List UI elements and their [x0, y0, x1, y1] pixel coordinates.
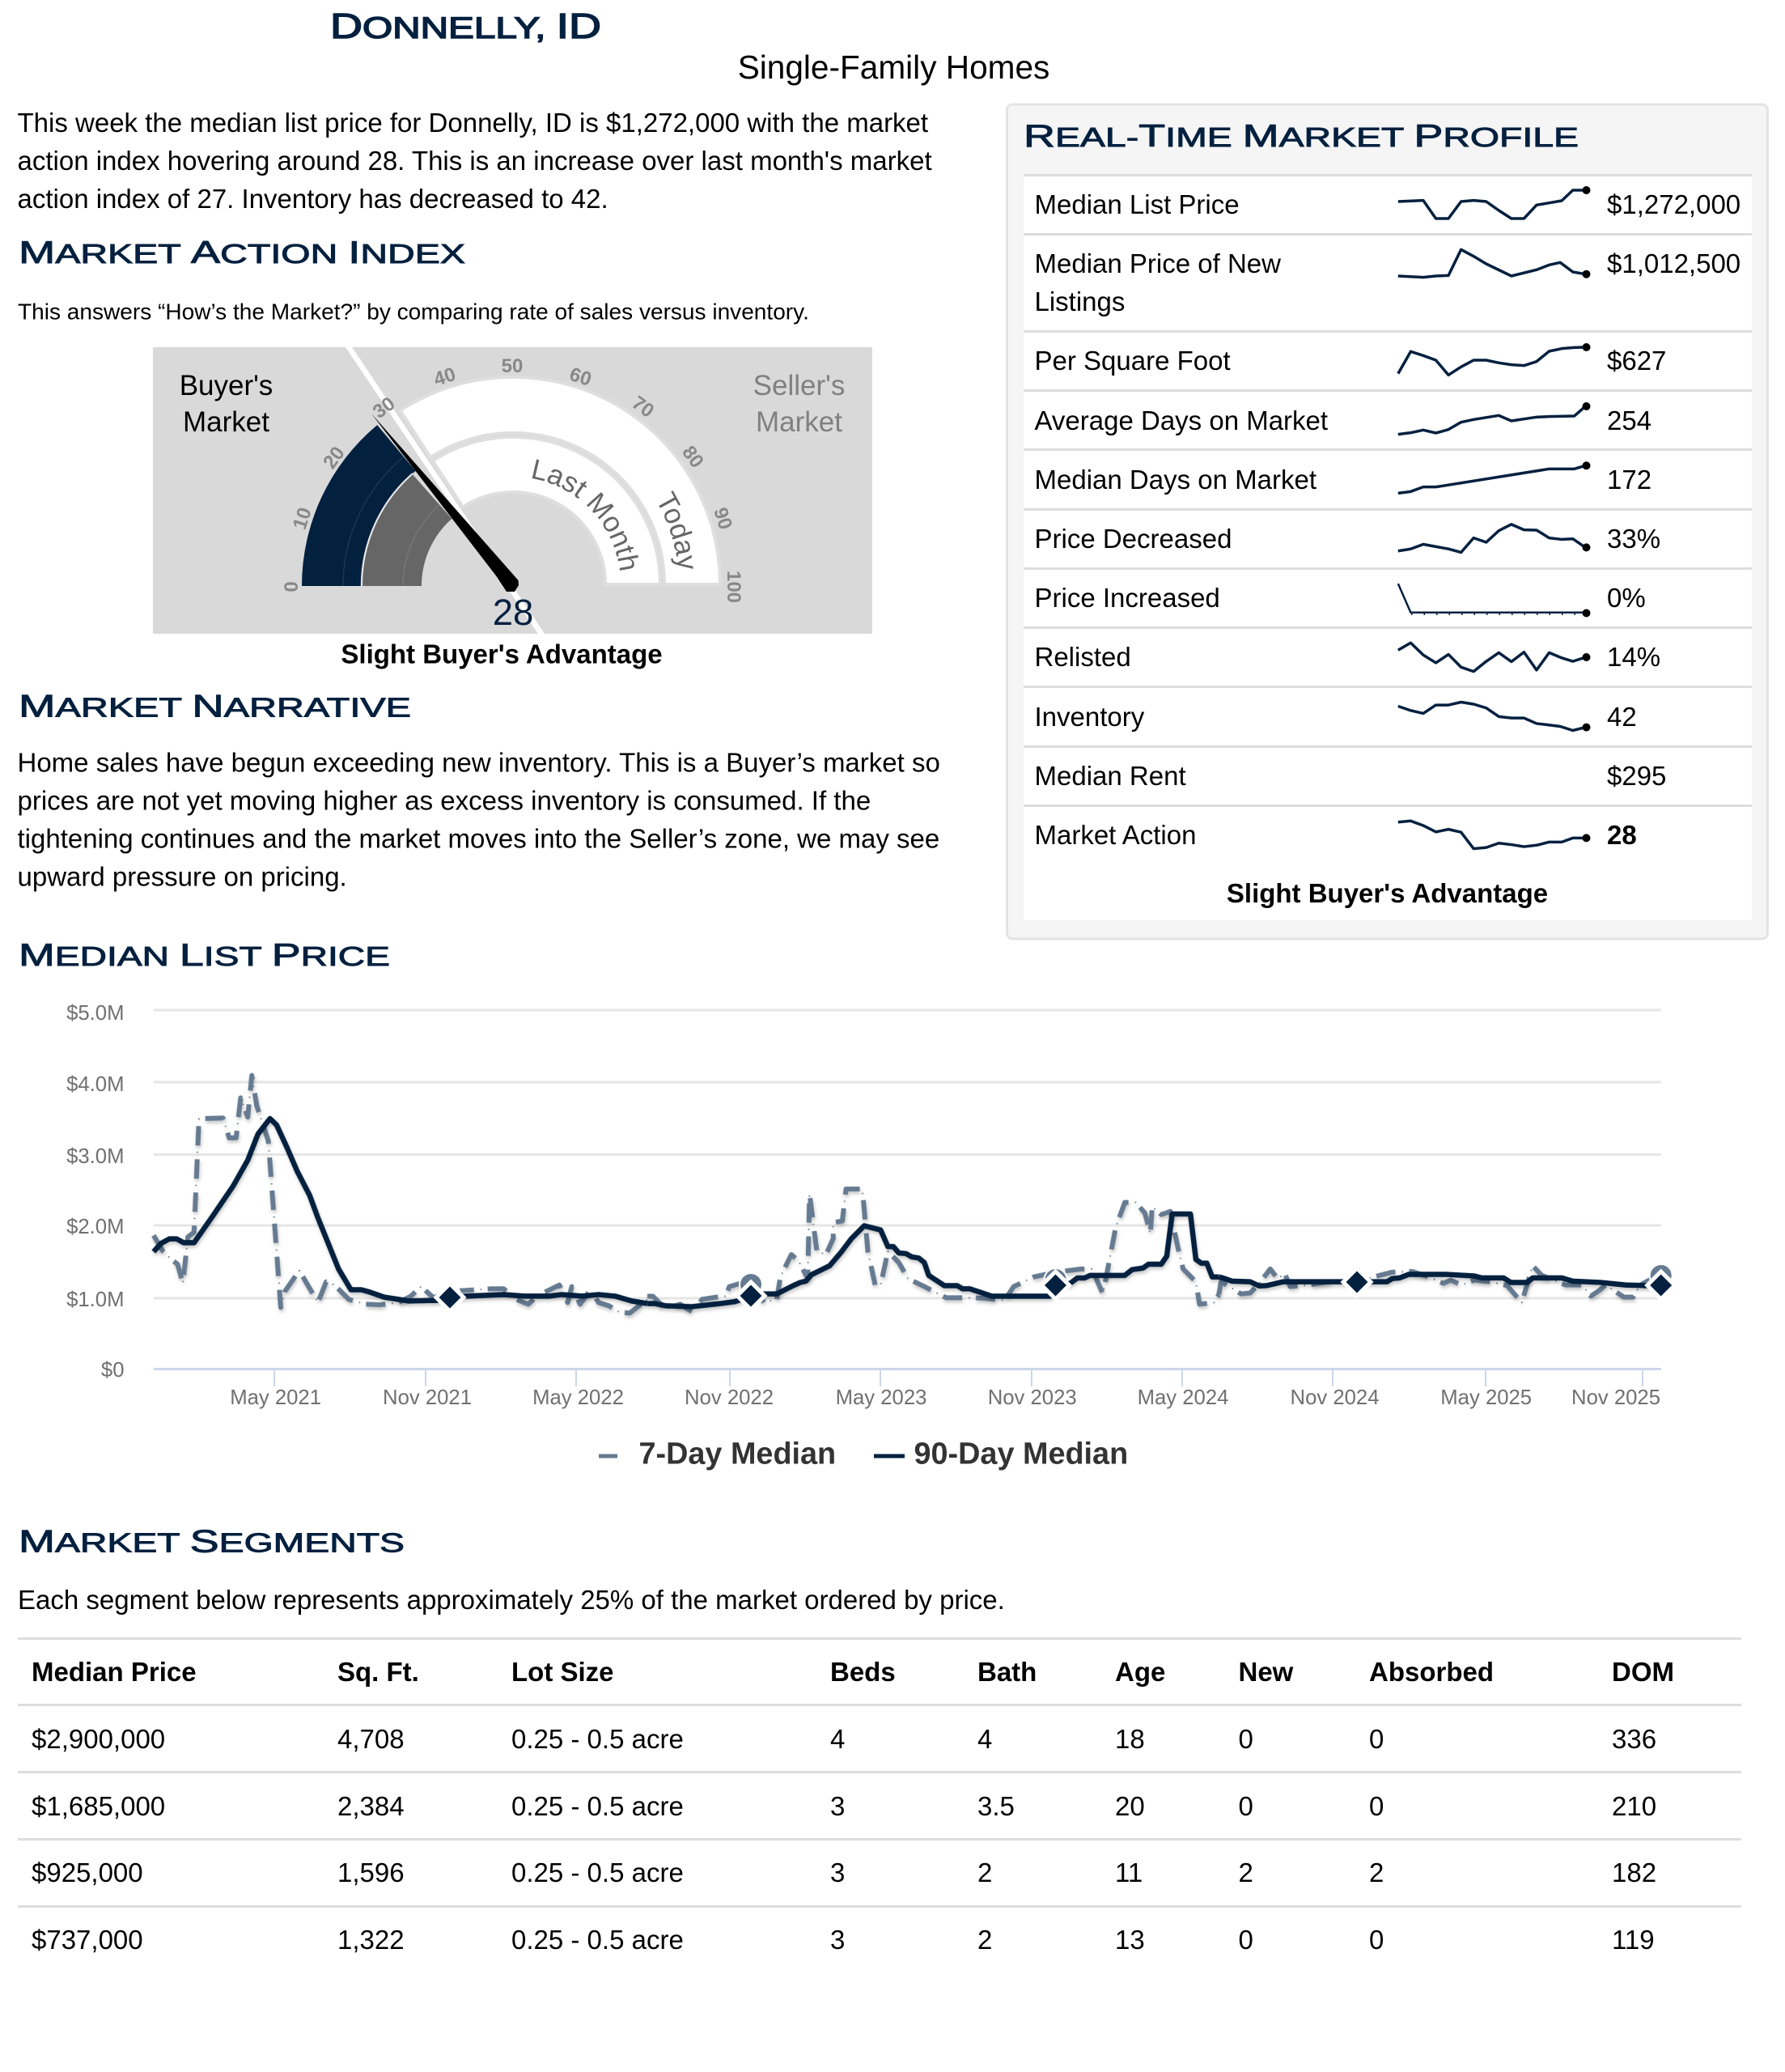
- table header: Median Price: [32, 1657, 197, 1687]
- table row 2: 0.25 - 0.5 acre: [511, 1791, 684, 1821]
- table row 1: 4: [830, 1724, 845, 1754]
- gauge: seller's market label: [753, 370, 845, 438]
- table row 4: [32, 1925, 1655, 1955]
- heading: market action index: M ARKET A CTION INDEX: [19, 236, 465, 270]
- y axis labels: $2.0M: [66, 1216, 125, 1238]
- y axis labels: [66, 1002, 125, 1382]
- x axis labels: May 2022: [532, 1386, 624, 1409]
- table row 3: 0.25 - 0.5 acre: [511, 1858, 684, 1887]
- legend: 7-day median: 7-Day Median: [639, 1437, 836, 1471]
- narrative paragraph: prices are not yet moving higher as excess inventory is consumed. If the: [18, 785, 871, 816]
- table row 3: 1,596: [337, 1858, 405, 1887]
- row: median rent: [1034, 761, 1666, 791]
- row: price increased: 0%: [1607, 583, 1646, 613]
- gauge: today label: Today: [659, 490, 693, 569]
- x axis labels: Nov 2025: [1571, 1386, 1660, 1409]
- gauge: scale ticks: 100: [723, 571, 744, 603]
- gauge: needle: [371, 414, 519, 592]
- y axis labels: $1.0M: [66, 1289, 125, 1311]
- gauge: scale ticks: 90: [709, 505, 736, 533]
- row: average days on market: 254: [1607, 405, 1651, 435]
- intro paragraph: action index of 27. Inventory has decreased to 42.: [18, 184, 608, 214]
- gauge: market action index: [153, 347, 872, 634]
- table header: Sq. Ft.: [337, 1657, 419, 1687]
- table row 3: $925,000: [32, 1858, 143, 1887]
- table row 4: 0: [1238, 1925, 1253, 1955]
- row: relisted: 14%: [1607, 642, 1660, 672]
- table row 3: 2: [1369, 1858, 1384, 1887]
- table row 3: [32, 1858, 1656, 1887]
- intro paragraph: This week the median list price for Donnelly, ID is $1,272,000 with the market: [18, 108, 928, 138]
- table header: Bath: [977, 1657, 1037, 1687]
- row: relisted: [1034, 642, 1660, 672]
- table header: Beds: [830, 1657, 896, 1687]
- table row 3: 2: [977, 1858, 992, 1887]
- y axis labels: $0: [101, 1359, 125, 1382]
- table row 1: $2,900,000: [32, 1724, 165, 1754]
- table row 2: 0: [1238, 1791, 1253, 1821]
- table row 1: 0: [1238, 1724, 1253, 1754]
- gauge: buyer's market label: Market: [183, 406, 269, 438]
- subtitle: Single-Family Homes: [738, 49, 1049, 86]
- gauge: seller's market label: Market: [756, 406, 842, 438]
- table row 2: 3.5: [977, 1791, 1015, 1821]
- x axis labels: May 2024: [1138, 1386, 1228, 1409]
- line chart: median list price: [66, 1002, 1675, 1471]
- gauge: scale ticks: 80: [677, 442, 708, 472]
- y axis labels: $4.0M: [66, 1073, 125, 1096]
- row: market action: [1034, 820, 1637, 850]
- x axis labels: Nov 2023: [988, 1386, 1077, 1409]
- gauge: white band last month: [433, 437, 660, 584]
- table row 2: 2,384: [337, 1791, 405, 1821]
- row: market action: Market Action: [1034, 820, 1196, 850]
- narrative paragraph: Home sales have begun exceeding new inventory. This is a Buyer’s market so: [18, 748, 940, 777]
- table header: Lot Size: [511, 1657, 614, 1687]
- x axis labels: Nov 2021: [383, 1386, 472, 1409]
- gauge: scale ticks: 10: [289, 505, 316, 533]
- table row 4: 2: [977, 1925, 992, 1955]
- title: DONNELLY, ID: [330, 7, 601, 46]
- heading: median list price: M EDIAN LIST P RICE: [19, 938, 390, 973]
- table row 4: $737,000: [32, 1925, 143, 1955]
- x axis labels: Nov 2022: [685, 1386, 774, 1409]
- gauge: scale ticks: 30: [369, 393, 399, 423]
- gauge: buyer's market label: Buyer's: [180, 370, 273, 401]
- table row 1: 18: [1115, 1724, 1145, 1754]
- narrative paragraph: upward pressure on pricing.: [18, 861, 347, 892]
- market action description: This answers “How’s the Market?” by comparing rate of sales versus inventory.: [18, 299, 809, 324]
- table row 3: 11: [1115, 1858, 1143, 1887]
- x axis labels: May 2025: [1440, 1386, 1532, 1409]
- table row 2: 20: [1115, 1791, 1145, 1821]
- row: per square foot: $627: [1607, 346, 1666, 376]
- table row 4: 0.25 - 0.5 acre: [511, 1925, 684, 1955]
- heading: market segments: M ARKET S EGMENTS: [19, 1525, 405, 1559]
- x axis labels: May 2023: [836, 1386, 926, 1409]
- narrative paragraph: tightening continues and the market moves into the Seller’s zone, we may see: [18, 824, 939, 853]
- markers: 7-day: [439, 1264, 1673, 1306]
- row: price decreased: [1034, 524, 1660, 554]
- series: 90-day median: [154, 1119, 1661, 1306]
- row: median rent: $295: [1607, 761, 1666, 791]
- table row 1: 4,708: [337, 1724, 405, 1754]
- row: average days on market: Average Days on Market: [1034, 405, 1328, 435]
- x axis labels: May 2021: [230, 1386, 321, 1409]
- row: median list price: $1,272,000: [1607, 189, 1740, 219]
- table row 4: 3: [830, 1925, 845, 1955]
- table row 1: [32, 1724, 1656, 1754]
- intro paragraph: [18, 108, 932, 214]
- table row 3: 3: [830, 1858, 845, 1887]
- row: median price of new listings: Median Price of New: [1034, 248, 1281, 278]
- row: median price of new listings: Listings: [1034, 287, 1125, 316]
- gauge: scale ticks: 60: [566, 363, 594, 391]
- gauge: seller's market label: Seller's: [753, 370, 845, 401]
- x axis labels: [230, 1386, 1660, 1409]
- table row 1: 336: [1612, 1724, 1656, 1754]
- gauge: today value arc: [302, 425, 416, 586]
- row: median price of new listings: [1034, 248, 1740, 316]
- series: 7-day median: [154, 1076, 1661, 1313]
- y axis labels: $5.0M: [66, 1002, 125, 1025]
- table header: Absorbed: [1369, 1657, 1494, 1687]
- intro paragraph: action index hovering around 28. This is an increase over last month's market: [18, 146, 932, 176]
- row: inventory: [1034, 702, 1637, 732]
- segments description: Each segment below represents approximately 25% of the market ordered by price.: [18, 1585, 1005, 1615]
- panel: real-time market profile: [1007, 104, 1767, 939]
- table row 1: 0: [1369, 1724, 1384, 1754]
- table row 4: 1,322: [337, 1925, 405, 1955]
- panel heading: R EAL- T IME M ARKET P ROFILE: [1024, 119, 1579, 154]
- table row 2: 3: [830, 1791, 845, 1821]
- gauge: last month label: Last Month: [532, 460, 638, 571]
- row: price increased: Price Increased: [1034, 583, 1220, 613]
- gauge: last month value arc: [363, 474, 452, 586]
- row: inventory: 42: [1607, 702, 1637, 732]
- legend: 90-day median: 90-Day Median: [914, 1437, 1128, 1471]
- row: median days on market: [1034, 461, 1651, 495]
- table row 3: 2: [1238, 1858, 1253, 1887]
- table header: [32, 1657, 1674, 1687]
- gauge: scale ticks: 50: [502, 355, 523, 377]
- row: per square foot: Per Square Foot: [1034, 346, 1231, 376]
- row: median list price: [1034, 186, 1740, 219]
- gauge: scale ticks: 40: [431, 363, 459, 391]
- x axis labels: Nov 2024: [1291, 1386, 1379, 1409]
- row: price decreased: 33%: [1607, 524, 1660, 554]
- row: per square foot: [1034, 343, 1666, 376]
- row: median list price: Median List Price: [1034, 189, 1240, 219]
- y axis labels: $3.0M: [66, 1145, 125, 1168]
- table header: Age: [1115, 1657, 1165, 1687]
- row: price increased: [1034, 583, 1646, 617]
- table row 2: $1,685,000: [32, 1791, 165, 1821]
- table row 1: 0.25 - 0.5 acre: [511, 1724, 684, 1754]
- table: market segments: [18, 1637, 1741, 1955]
- gauge: scale ticks: 20: [319, 443, 350, 473]
- row: market action: 28: [1607, 820, 1637, 850]
- row: median price of new listings: $1,012,500: [1607, 248, 1740, 278]
- gauge: scale ticks: 0: [281, 581, 303, 592]
- gauge: scale ticks: [281, 355, 744, 603]
- gauge: value: 28: [493, 592, 533, 633]
- table row 4: 119: [1612, 1925, 1655, 1955]
- narrative paragraph: [18, 748, 940, 892]
- row: median rent: Median Rent: [1034, 761, 1186, 791]
- gauge caption: Slight Buyer's Advantage: [341, 639, 663, 669]
- heading: market narrative: M ARKET N ARRATIVE: [19, 690, 411, 724]
- table row 4: 0: [1369, 1925, 1384, 1955]
- row: relisted: Relisted: [1034, 642, 1131, 672]
- gauge: buyer's market label: [180, 370, 273, 438]
- table row 2: 210: [1612, 1791, 1656, 1821]
- table row 1: 4: [977, 1724, 992, 1754]
- table row 4: 13: [1115, 1925, 1145, 1955]
- row: price decreased: Price Decreased: [1034, 524, 1232, 554]
- markers: 90-day: [436, 1268, 1675, 1311]
- table row 3: 182: [1612, 1858, 1656, 1887]
- row: median days on market: 172: [1607, 465, 1651, 495]
- row: median days on market: Median Days on Market: [1034, 465, 1316, 495]
- row: average days on market: [1034, 402, 1651, 435]
- gauge: scale ticks: 70: [628, 392, 658, 422]
- panel caption: Slight Buyer's Advantage: [1227, 878, 1548, 908]
- table row 2: [32, 1791, 1656, 1821]
- table row 2: 0: [1369, 1791, 1384, 1821]
- table header: DOM: [1612, 1657, 1674, 1687]
- gauge: white band today: [400, 377, 720, 584]
- table header: New: [1238, 1657, 1294, 1687]
- row: inventory: Inventory: [1034, 702, 1145, 732]
